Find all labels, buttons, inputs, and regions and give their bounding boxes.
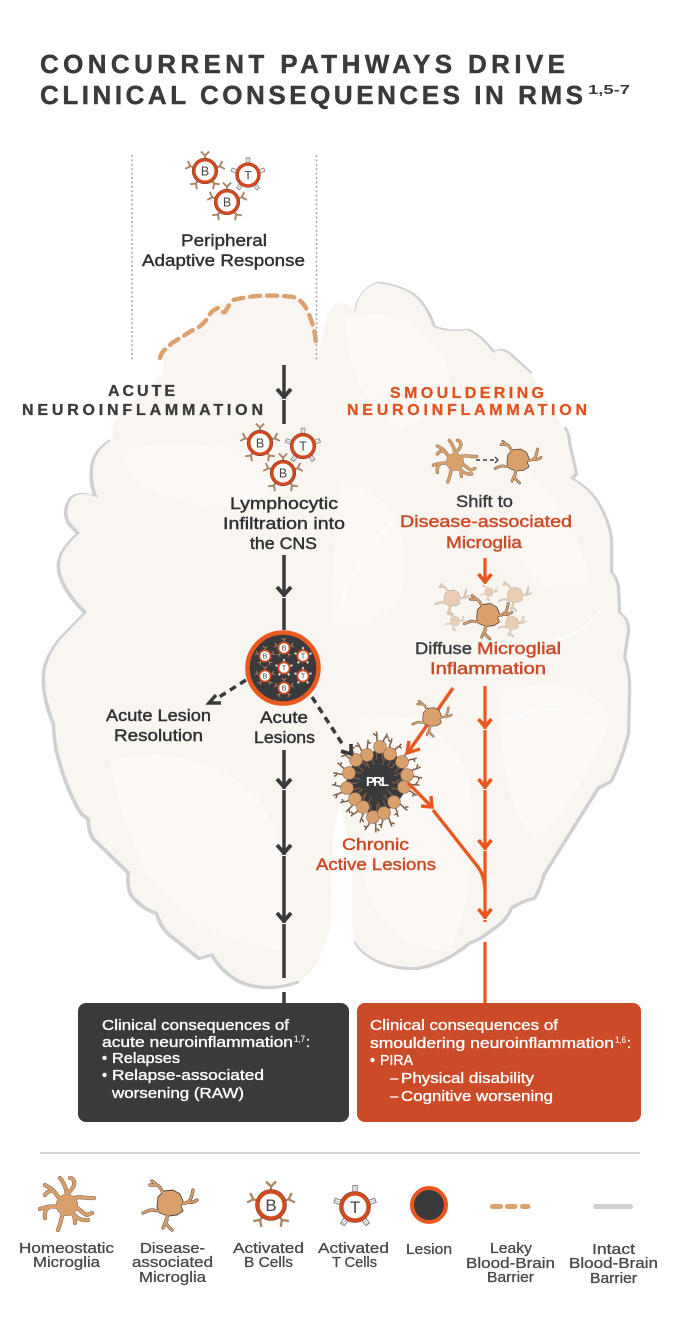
legend item: intact blood-brain barrier: Intact: [592, 1242, 635, 1258]
arrow: dashed to lesion resolution: [209, 680, 246, 703]
panel: acute clinical consequences: acute neuroinflammation: [102, 1035, 293, 1051]
legend item: homeostatic microglia: [19, 1178, 114, 1271]
legend item: activated B cells: B Cells: [244, 1255, 293, 1271]
panel: acute clinical consequences: Clinical consequences of: [102, 1018, 290, 1034]
panel: smouldering clinical consequences: :: [627, 1036, 631, 1052]
icon: paramagnetic rim lesion: [331, 731, 423, 833]
label: acute lesions: [254, 709, 315, 747]
legend item: activated T cells: T Cells: [332, 1255, 377, 1271]
arrow: infiltration to acute lesions: [277, 555, 291, 630]
arrow: shift to diffuse inflammation: [478, 558, 492, 584]
icon: acute lesion with lymphocytes: B: [282, 685, 287, 693]
arrow: diffuse inflammation to clinical consequences: [478, 686, 492, 1003]
icon: acute lesion with lymphocytes: T: [301, 653, 306, 661]
label: peripheral adaptive response: [142, 232, 305, 270]
label: chronic active lesions: [316, 836, 436, 874]
panel: smouldering clinical consequences: •: [370, 1053, 375, 1069]
legend item: disease-associated microglia: [132, 1181, 213, 1286]
legend item: lesion: Lesion: [406, 1242, 452, 1258]
label: acute lesion resolution: Acute Lesion: [106, 707, 211, 725]
dotted boundary lines: [132, 155, 316, 360]
arrow: microglia to chronic active lesion: [407, 688, 453, 753]
arrow: dashed to chronic active lesion: [312, 697, 351, 754]
icon: acute lesion with lymphocytes: B: [282, 645, 287, 653]
label: lymphocytic infiltration: the CNS: [250, 535, 317, 553]
legend item: activated B cells: [233, 1182, 304, 1271]
legend item: activated T cells: T: [350, 1198, 360, 1217]
label: shift to disease-associated microglia: Shift to: [456, 493, 513, 511]
label: peripheral adaptive response: Peripheral: [181, 232, 267, 250]
icons: peripheral B and T cells: [185, 151, 265, 220]
panel: smouldering clinical consequences: –: [390, 1071, 399, 1087]
legend: [19, 1178, 658, 1287]
label: chronic active lesions: Active Lesions: [316, 856, 436, 874]
legend item: leaky blood-brain barrier: Blood-Brain: [466, 1256, 555, 1272]
label: diffuse microglial inflammation: [415, 640, 561, 678]
panel: smouldering clinical consequences: smouldering neuroinflammation: [370, 1036, 614, 1052]
label: diffuse microglial inflammation: Microglial: [477, 640, 561, 658]
label: diffuse microglial inflammation: Diffuse: [415, 640, 472, 658]
label: lymphocytic infiltration: [223, 495, 345, 553]
icons: infiltrating B and T cells: B: [279, 467, 287, 481]
legend item: activated B cells: Activated: [233, 1241, 304, 1257]
panel: smouldering clinical consequences: PIRA: [380, 1053, 413, 1069]
icon: acute lesion with lymphocytes: [248, 632, 318, 704]
label: acute lesion resolution: Resolution: [114, 727, 203, 745]
icons: diffuse microglia cluster: [435, 582, 531, 639]
legend item: disease-associated microglia: Disease-: [140, 1241, 205, 1257]
title: CLINICAL CONSEQUENCES IN RMS: [40, 80, 583, 110]
icons: infiltrating B and T cells: [240, 423, 321, 491]
label: chronic active lesions: Chronic: [342, 836, 409, 854]
legend item: intact blood-brain barrier: [569, 1204, 658, 1287]
icon: paramagnetic rim lesion: PRL: [366, 774, 389, 789]
panel: smouldering clinical consequences: –: [390, 1089, 399, 1105]
label: acute lesions: Lesions: [254, 729, 315, 747]
panel: acute clinical consequences: worsening (RAW): [111, 1086, 244, 1102]
legend item: homeostatic microglia: Homeostatic: [19, 1241, 114, 1257]
icons: infiltrating B and T cells: T: [299, 440, 307, 454]
panel: acute clinical consequences: Relapse-associated: [112, 1068, 264, 1084]
title: [40, 49, 630, 110]
legend item: activated T cells: Activated: [318, 1241, 389, 1257]
label: shift to disease-associated microglia: Disease-associated: [400, 513, 572, 531]
legend item: activated T cells: [318, 1186, 389, 1271]
icon: acute lesion with lymphocytes: T: [282, 665, 287, 673]
label: lymphocytic infiltration: Infiltration into: [223, 515, 345, 533]
icons: peripheral B and T cells: T: [244, 168, 252, 182]
label: diffuse microglial inflammation: Inflammation: [430, 660, 546, 678]
panel: smouldering clinical consequences: Physical disability: [401, 1071, 535, 1087]
panel: acute clinical consequences: Relapses: [112, 1051, 180, 1067]
arrow: acute lesions to clinical consequences: [277, 750, 291, 1003]
label: shift to disease-associated microglia: [400, 493, 572, 552]
icons: peripheral B and T cells: B: [201, 165, 209, 179]
heading: smouldering neuroinflammation: SMOULDERING: [390, 385, 544, 402]
heading: smouldering neuroinflammation: [347, 385, 587, 419]
legend item: disease-associated microglia: associated: [132, 1255, 213, 1271]
label: acute lesion resolution: [106, 707, 211, 745]
legend item: intact blood-brain barrier: Barrier: [590, 1271, 637, 1287]
panel: smouldering clinical consequences: Clinical consequences of: [370, 1018, 559, 1034]
panel: acute clinical consequences: 1,7: [294, 1034, 305, 1044]
panel: smouldering clinical consequences: 1,6: [615, 1035, 626, 1045]
leaky blood-brain barrier outline: [160, 296, 316, 358]
panel: acute clinical consequences: [78, 1003, 349, 1122]
label: peripheral adaptive response: Adaptive Response: [142, 252, 305, 270]
legend item: homeostatic microglia: Microglia: [33, 1255, 101, 1271]
icons: microglia shift: [433, 440, 541, 483]
icon: acute lesion with lymphocytes: T: [301, 673, 306, 681]
heading: acute neuroinflammation: NEUROINFLAMMATION: [22, 402, 263, 419]
heading: acute neuroinflammation: [22, 383, 263, 419]
panel: acute clinical consequences: :: [306, 1035, 310, 1051]
panel: smouldering clinical consequences: [357, 1003, 641, 1122]
legend item: leaky blood-brain barrier: [466, 1204, 555, 1286]
panel: acute clinical consequences: •: [102, 1068, 107, 1084]
title: CONCURRENT PATHWAYS DRIVE: [40, 49, 565, 79]
panel: smouldering clinical consequences: Cognitive worsening: [401, 1089, 553, 1105]
legend item: lesion: [406, 1188, 452, 1258]
legend item: activated B cells: B: [265, 1196, 277, 1215]
arrow: peripheral to infiltration: [277, 365, 291, 424]
icon: acute lesion with lymphocytes: B: [263, 653, 268, 661]
label: shift to disease-associated microglia: Microglia: [446, 534, 523, 552]
label: acute lesions: Acute: [260, 709, 308, 727]
legend item: leaky blood-brain barrier: Leaky: [490, 1241, 533, 1257]
legend item: disease-associated microglia: Microglia: [139, 1270, 207, 1286]
label: lymphocytic infiltration: Lymphocytic: [230, 495, 338, 513]
icons: peripheral B and T cells: B: [223, 196, 231, 210]
title: 1,5-7: [588, 82, 630, 97]
brain illustration: [44, 283, 629, 987]
heading: smouldering neuroinflammation: NEUROINFLAMMATION: [347, 402, 587, 419]
legend item: leaky blood-brain barrier: Barrier: [487, 1270, 534, 1286]
icons: infiltrating B and T cells: B: [256, 437, 264, 451]
icon: acute lesion with lymphocytes: B: [263, 673, 268, 681]
legend item: intact blood-brain barrier: Blood-Brain: [569, 1256, 658, 1272]
heading: acute neuroinflammation: ACUTE: [108, 383, 175, 400]
panel: acute clinical consequences: •: [102, 1051, 107, 1067]
arrow: chronic lesion to smouldering consequences: [408, 783, 485, 890]
